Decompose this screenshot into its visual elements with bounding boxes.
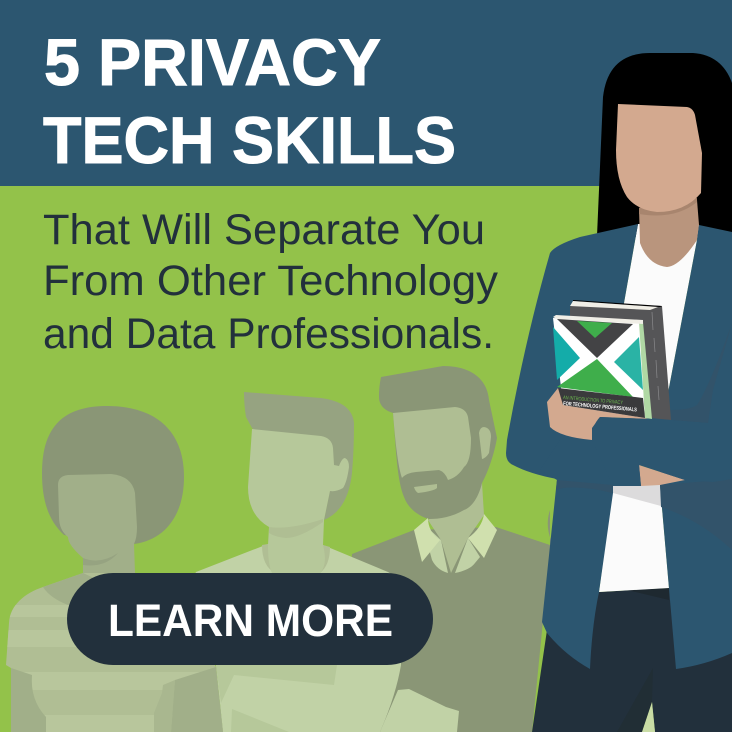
person: left woman with afro <box>0 406 230 732</box>
hair <box>597 53 732 240</box>
skin: hand on book <box>547 388 648 440</box>
title <box>43 25 456 177</box>
subtitle <box>43 206 498 358</box>
book: front cover: FOR TECHNOLOGY PROFESSIONALS <box>563 401 637 413</box>
title: 5 PRIVACY <box>44 25 381 99</box>
face <box>616 104 702 212</box>
book: back copy <box>570 300 671 420</box>
pants <box>532 588 732 732</box>
skin: lower hand <box>639 465 685 486</box>
book: front cover: AN INTRODUCTION TO PRIVACY <box>563 395 624 406</box>
title: TECH SKILLS <box>43 103 456 177</box>
header band <box>0 0 732 186</box>
button: learn more <box>67 573 433 665</box>
subtitle: and Data Professionals. <box>43 310 494 358</box>
button: learn more: LEARN MORE <box>108 595 393 646</box>
subtitle: That Will Separate You <box>43 206 485 254</box>
person: right man with beard <box>340 366 551 732</box>
book: front cover <box>553 315 652 419</box>
person: woman holding books <box>506 53 732 732</box>
person: middle man <box>186 392 459 732</box>
neck <box>639 200 699 267</box>
jacket shadows <box>660 479 732 550</box>
subtitle: From Other Technology <box>43 257 498 305</box>
jacket: forearm over book <box>592 417 732 486</box>
shirt <box>620 224 699 420</box>
jacket <box>506 224 732 669</box>
